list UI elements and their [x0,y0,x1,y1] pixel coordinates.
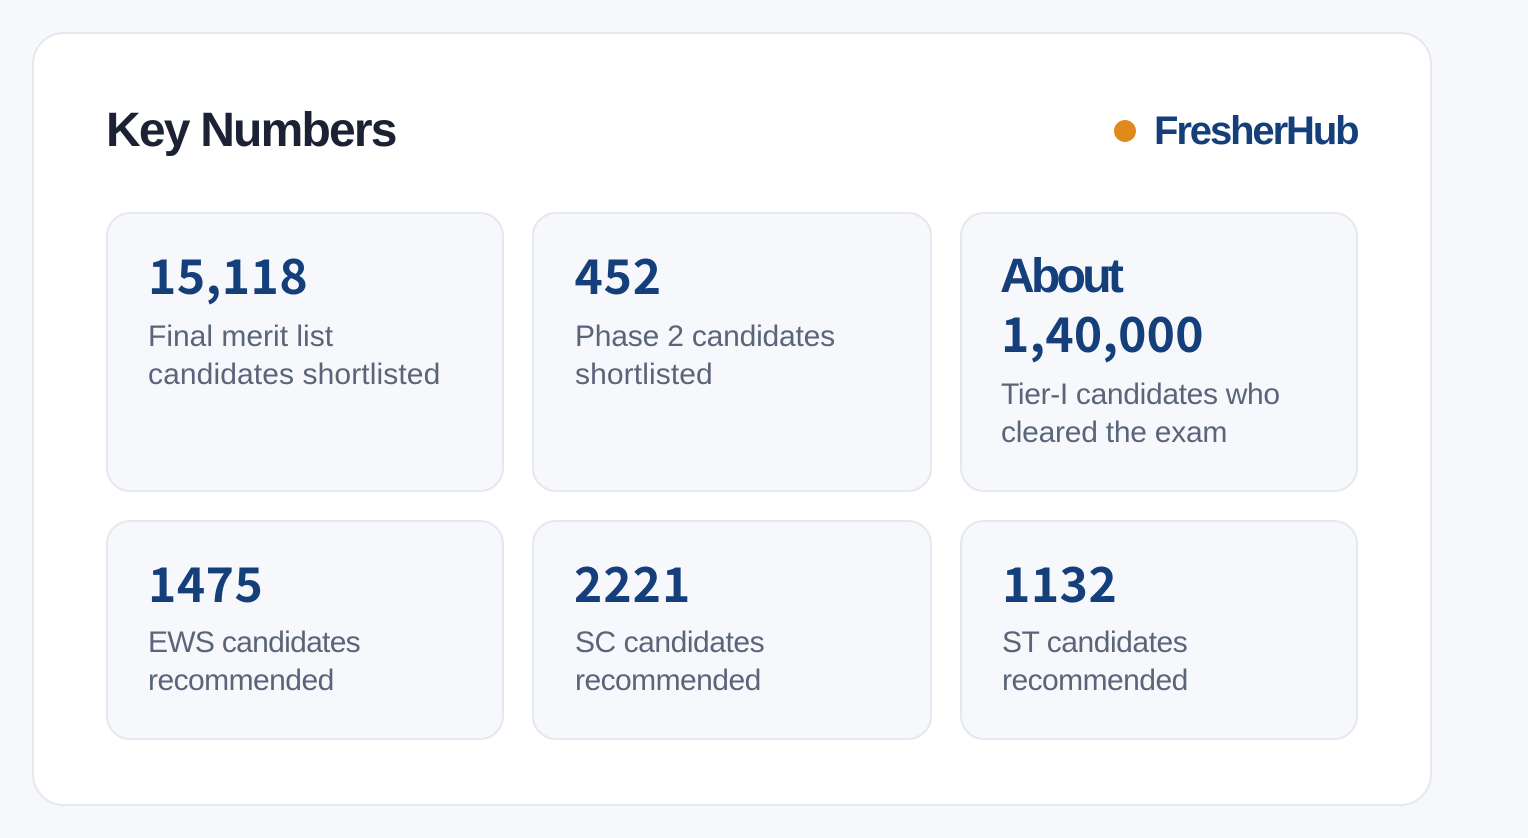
number: 1,40,000 [1001,296,1204,366]
card: EWS [106,520,504,740]
label: Final merit list [148,320,333,353]
label [148,626,360,697]
number: 452 [574,238,662,308]
label: Phase 2 candidates [575,320,835,353]
brand name: FresherHub [1154,109,1358,153]
number: 2221 [574,546,691,616]
heading: Key Numbers [106,104,396,157]
card: tier-I [960,212,1358,492]
label: Tier-I candidates who [1001,378,1280,411]
label [1002,626,1188,697]
label [1001,378,1280,449]
number: 1475 [148,546,263,616]
label: recommended [1002,664,1188,697]
label: recommended [148,664,334,697]
label: candidates shortlisted [148,358,440,391]
label: SC candidates [575,626,764,659]
number: 15,118 [148,238,308,308]
label: EWS candidates [148,626,360,659]
card: final merit list [106,212,504,492]
label [575,626,764,697]
icon: brand dot [1114,120,1136,142]
card: SC [532,520,932,740]
label: ST candidates [1002,626,1187,659]
card: phase 2 [532,212,932,492]
label: shortlisted [575,358,713,391]
number: 1132 [1002,546,1117,616]
number: About [1000,250,1120,303]
label [575,320,835,391]
number [1000,250,1204,366]
card: ST [960,520,1358,740]
label: recommended [575,664,761,697]
label: cleared the exam [1001,416,1227,449]
label [148,320,440,391]
